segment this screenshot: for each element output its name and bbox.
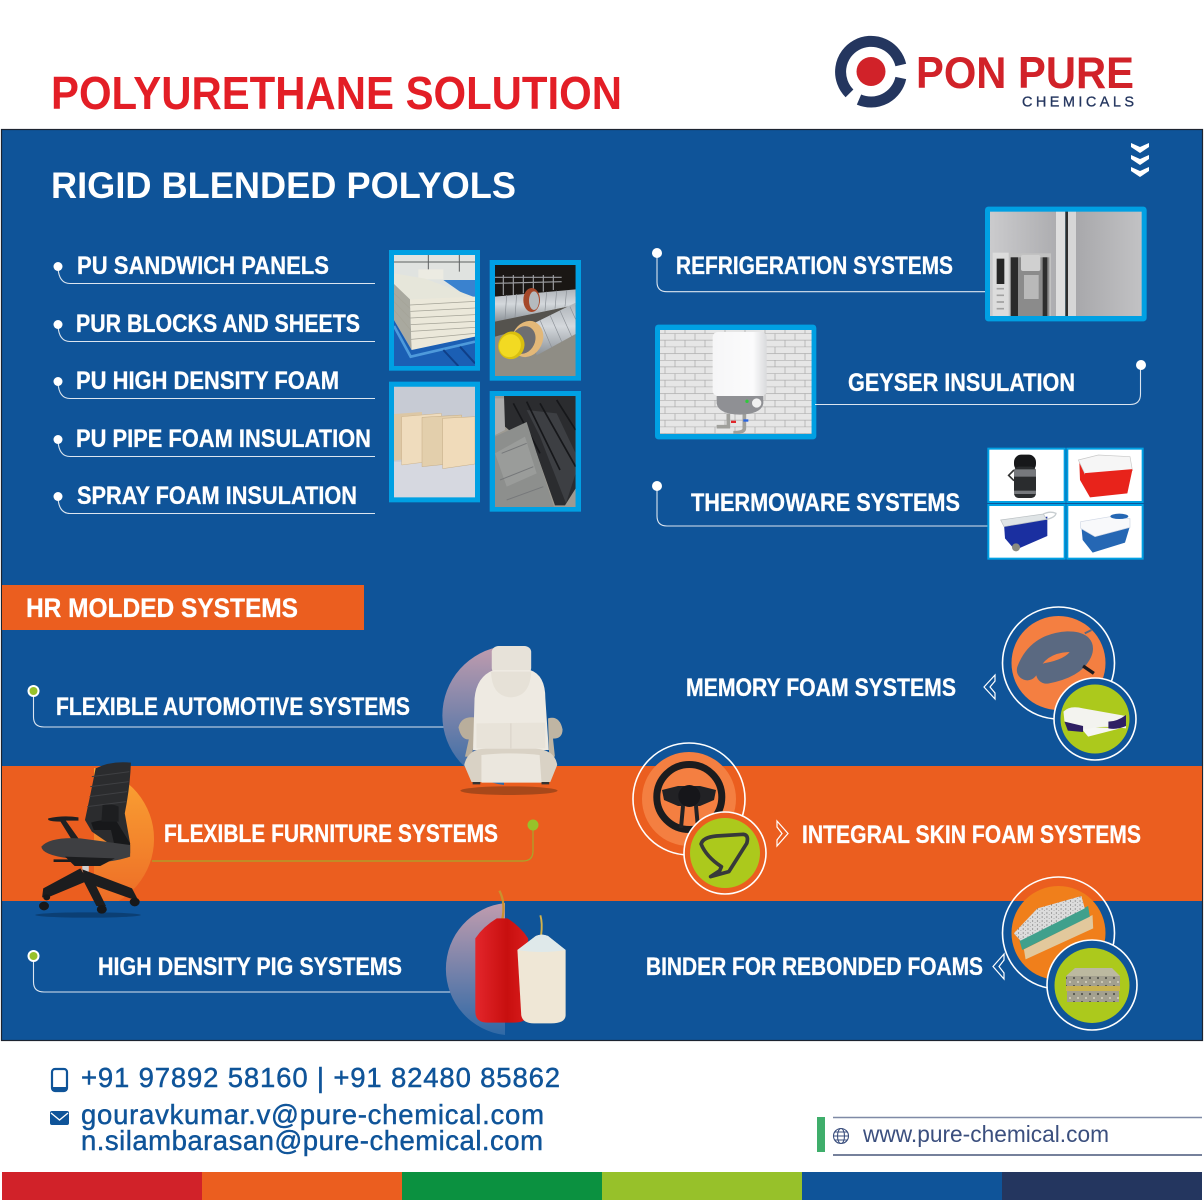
image: automotive seat [458,646,563,795]
item: flexible furniture systems: FLEXIBLE FURNITURE SYSTEMS [164,820,498,848]
item: flexible furniture systems [152,820,538,861]
crescent behind candles [446,903,505,1035]
item: PU sandwich panels: PU SANDWICH PANELS [77,252,329,280]
logo: Pon Pure Chemicals: PON PURE [916,49,1134,98]
image: contour pillow [1063,707,1126,737]
cell: wheeled cooler [988,505,1065,559]
cell: red cooler [1067,449,1143,502]
item: high density pig systems: HIGH DENSITY PIG SYSTEMS [98,953,402,981]
banner: HR molded systems [2,585,364,630]
item: thermoware systems: THERMOWARE SYSTEMS [691,489,960,517]
email addresses: gouravkumar.v@pure-chemical.com [81,1099,544,1130]
item: memory foam systems: MEMORY FOAM SYSTEMS [686,674,956,702]
footer contacts [50,1062,560,1156]
photo: high density foam boards [389,382,480,502]
cell: insulated flask [988,449,1065,502]
list: rigid applications [54,252,375,514]
photo: spray foam stone texture [490,391,581,512]
image: steering wheel [657,764,722,830]
item: integral skin foam systems: INTEGRAL SKIN FOAM SYSTEMS [802,821,1141,849]
phone numbers: +91 97892 58160 | +91 82480 85862 [81,1062,560,1093]
image: office chair [35,762,141,918]
logo: Pon Pure Chemicals: CHEMICALS [1022,94,1134,110]
item: binder for rebonded foams: BINDER FOR REBONDED FOAMS [646,953,983,981]
photo: insulated pipes [490,260,581,381]
item: high density pig systems [28,950,452,992]
item: PU pipe foam insulation: PU PIPE FOAM INSULATION [76,425,371,453]
email addresses: n.silambarasan@pure-chemical.com [81,1125,543,1156]
item: refrigeration systems: REFRIGERATION SYSTEMS [676,252,953,280]
item: geyser insulation [815,360,1146,404]
image: armrest [701,834,747,877]
crescent behind car seat [442,646,504,785]
photo: sandwich panels [389,250,480,371]
photo: water heater [655,325,816,439]
icon group: memory foam products [1002,607,1136,760]
image: neck pillow [1027,630,1094,673]
image: compressed foam stack [1066,968,1120,1002]
item: PUR blocks and sheets: PUR BLOCKS AND SHEETS [76,310,360,338]
website block [817,1117,1202,1155]
item: PU high density foam: PU HIGH DENSITY FOAM [76,367,339,395]
icon group: integral skin products [633,743,766,894]
heading: rigid blended polyols: RIGID BLENDED POLYOLS [51,165,516,206]
item: geyser insulation: GEYSER INSULATION [848,369,1075,397]
item: thermoware systems [652,481,989,526]
decorative chevrons icon [1131,143,1149,177]
image: rebonded foam slabs [1014,896,1093,959]
icon: globe [834,1128,848,1144]
thermoware image grid [988,449,1143,559]
colour strip [2,1172,1202,1200]
cell: blue cooler [1067,505,1143,559]
item: spray foam insulation: SPRAY FOAM INSULATION [77,482,357,510]
crescent behind office chair [94,768,154,910]
icon: phone [52,1069,67,1091]
icon group: rebonded foam products [1002,877,1137,1030]
image: pig candles [475,891,566,1023]
main blue panel [2,130,1202,1040]
orange stripe [2,766,1202,901]
item: flexible automotive systems: FLEXIBLE AUTOMOTIVE SYSTEMS [56,693,410,721]
banner: HR molded systems: HR MOLDED SYSTEMS [26,593,298,623]
website url: www.pure-chemical.com [862,1121,1109,1147]
photo: refrigerator [985,207,1147,321]
email addresses [81,1099,544,1156]
item: refrigeration systems [652,248,987,292]
logo: Pon Pure Chemicals [841,41,1134,110]
header title: POLYURETHANE SOLUTION [51,67,622,119]
icon: mail [50,1111,69,1125]
item: flexible automotive systems [28,685,446,727]
